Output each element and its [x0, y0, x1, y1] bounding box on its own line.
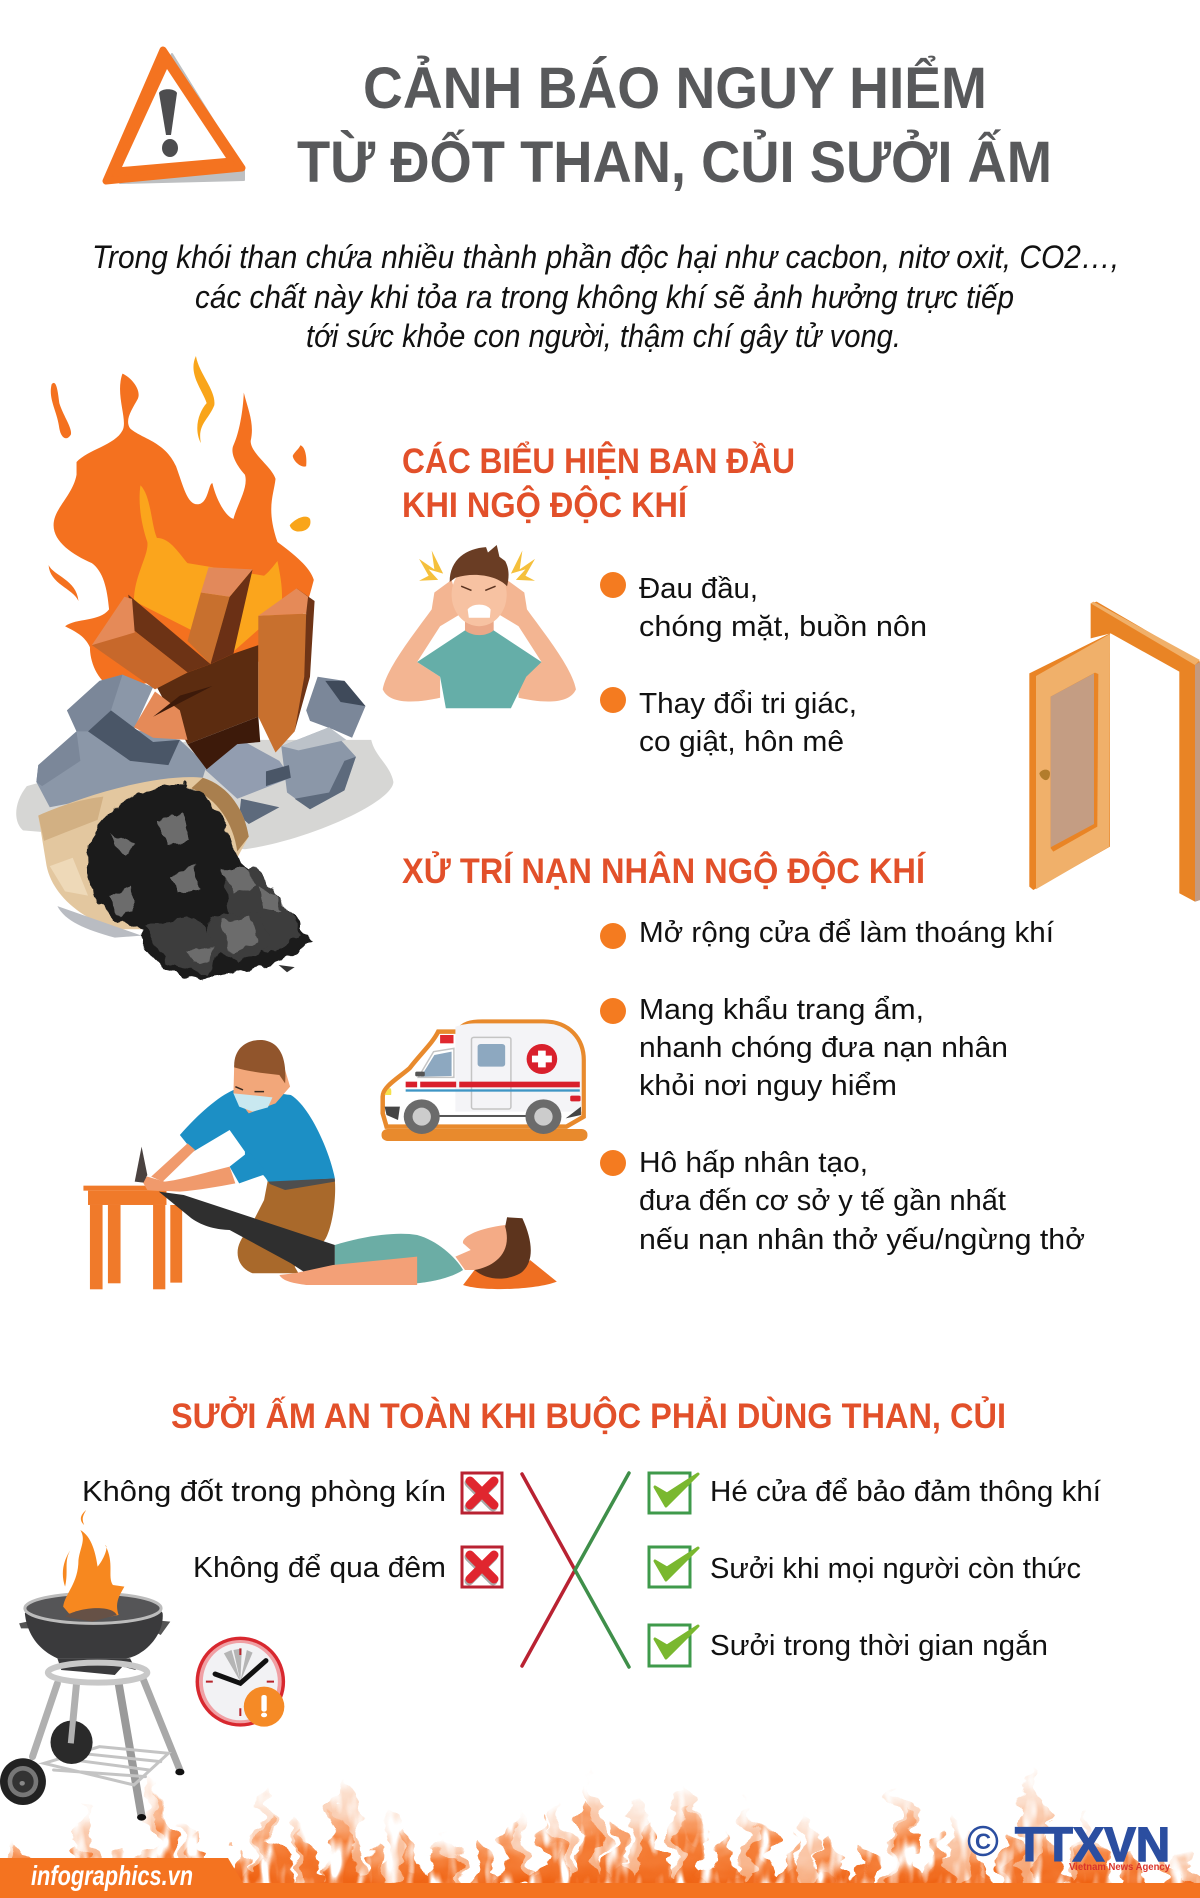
footer band — [0, 1858, 1200, 1898]
bullet list: treatment: Hô hấp nhân tạo, — [639, 1147, 868, 1179]
divider: red and green crossed lines — [522, 1473, 629, 1667]
illustration: rescuer helping victim — [83, 1040, 557, 1289]
illustration: open door — [1029, 602, 1200, 902]
heading: initial symptoms — [402, 441, 795, 525]
illustration: man with headache — [383, 545, 576, 708]
intro text — [92, 239, 1119, 354]
list: do: Sưởi khi mọi người còn thức — [710, 1553, 1081, 1585]
heading: safe heating: SƯỞI ẤM AN TOÀN KHI BUỘC PHẢI DÙNG THAN, CỦI — [171, 1396, 1006, 1436]
intro text: Trong khói than chứa nhiều thành phần độc hại như cacbon, nitơ oxit, CO2…, — [92, 239, 1119, 275]
flames along the bottom — [0, 1770, 1200, 1895]
icon: alarm clock — [196, 1637, 285, 1727]
heading: initial symptoms: CÁC BIỂU HIỆN BAN ĐẦU — [402, 441, 795, 481]
title: CẢNH BÁO NGUY HIỂM — [363, 56, 987, 121]
bullet list: treatment: nếu nạn nhân thở yếu/ngừng thở — [639, 1224, 1085, 1256]
icon: green check box 1 — [649, 1473, 698, 1513]
icon: red cross box 2 — [462, 1547, 502, 1587]
bullet list: treatment: đưa đến cơ sở y tế gần nhất — [639, 1185, 1006, 1217]
bullet list: treatment: khỏi nơi nguy hiểm — [639, 1070, 897, 1102]
bullet list: symptoms: chóng mặt, buồn nôn — [639, 611, 927, 643]
illustration: campfire with rocks and coal sack — [16, 356, 393, 980]
bullet list: symptoms — [600, 572, 927, 758]
icon: warning triangle — [106, 50, 244, 183]
list: do not — [82, 1476, 446, 1584]
logo: TTXVN: C — [975, 1829, 991, 1854]
illustration: charcoal grill — [0, 1510, 184, 1821]
list: do: Sưởi trong thời gian ngắn — [710, 1629, 1048, 1662]
bullet list: treatment — [600, 917, 1085, 1256]
icon: green check box 2 — [649, 1547, 698, 1587]
rocks — [36, 675, 365, 824]
bullet list: symptoms: co giật, hôn mê — [639, 726, 844, 758]
bullet list: symptoms: Đau đầu, — [639, 573, 758, 605]
logo: TTXVN: TTXVN — [1015, 1819, 1170, 1872]
list: do not: Không đốt trong phòng kín — [82, 1476, 446, 1508]
heading: treatment: XỬ TRÍ NẠN NHÂN NGỘ ĐỘC KHÍ — [402, 851, 926, 891]
coal sack — [38, 777, 312, 980]
intro text: tới sức khỏe con người, thậm chí gây tử vong. — [306, 318, 901, 354]
list: do not: Không để qua đêm — [193, 1552, 446, 1584]
icon: green check box 3 — [649, 1625, 698, 1666]
icon: red cross box 1 — [462, 1473, 502, 1513]
title: TỪ ĐỐT THAN, CỦI SƯỞI ẤM — [297, 130, 1052, 195]
heading: initial symptoms: KHI NGỘ ĐỘC KHÍ — [402, 485, 688, 525]
bullet list: treatment: Mở rộng cửa để làm thoáng khí — [639, 917, 1054, 949]
list: do: Hé cửa để bảo đảm thông khí — [710, 1476, 1101, 1508]
website label: infographics.vn — [31, 1860, 193, 1891]
intro text: các chất này khi tỏa ra trong không khí sẽ ảnh hưởng trực tiếp — [195, 279, 1014, 315]
bullet list: treatment: Mang khẩu trang ẩm, — [639, 994, 924, 1026]
title — [297, 56, 1052, 195]
bullet list: symptoms: Thay đổi tri giác, — [639, 688, 857, 720]
logs — [92, 567, 315, 769]
illustration: ambulance — [382, 1022, 587, 1141]
bullet list: treatment: nhanh chóng đưa nạn nhân — [639, 1032, 1008, 1064]
list: do — [710, 1476, 1101, 1662]
logo: TTXVN: Vietnam News Agency — [1069, 1862, 1170, 1873]
